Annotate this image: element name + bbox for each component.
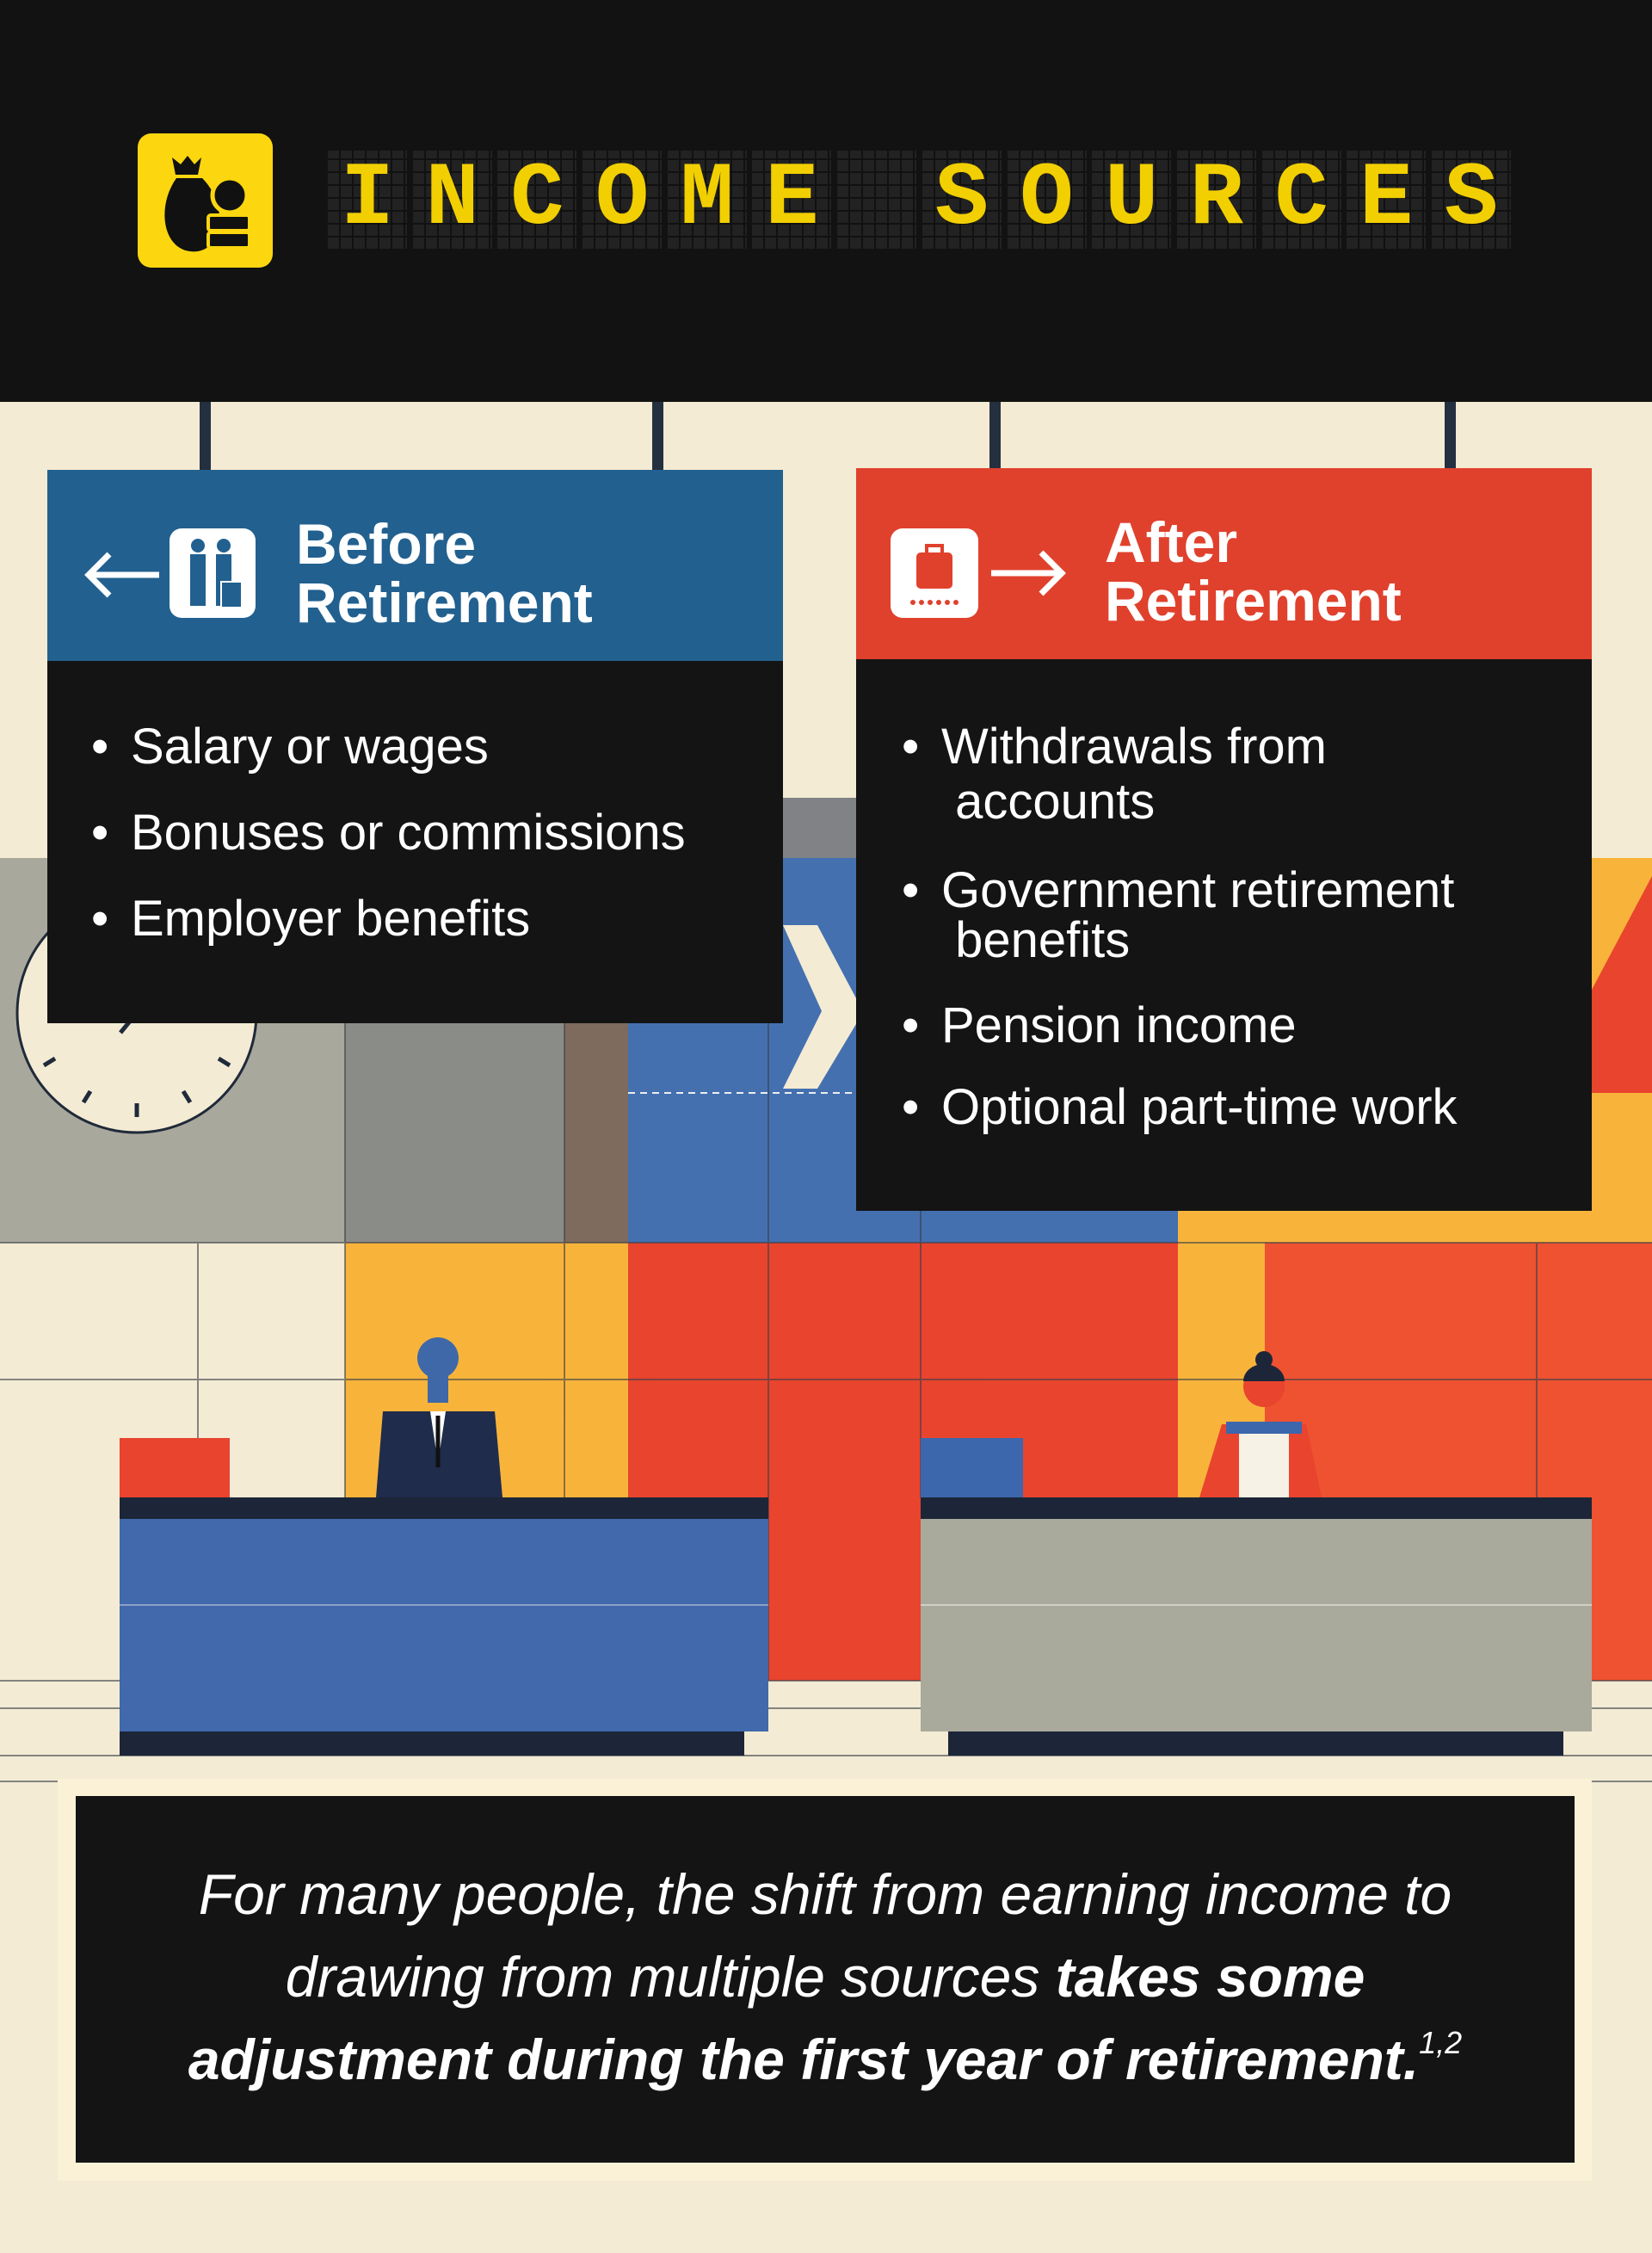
callout: summary — [58, 1779, 1592, 2181]
panel: after retirement — [856, 468, 1592, 1211]
list: after: Optional part-time work — [941, 1079, 1458, 1135]
list: before — [93, 719, 686, 947]
heading: before retirement: Retirement — [296, 571, 593, 634]
list: after: Pension income — [941, 997, 1297, 1053]
icon: plane — [783, 925, 856, 1089]
list: after: accounts — [955, 774, 1155, 830]
icon: clock — [17, 893, 256, 1133]
title: INCOME SOURCES: O — [1020, 149, 1074, 250]
title: INCOME SOURCES — [328, 149, 1511, 250]
title: INCOME SOURCES: N — [425, 149, 479, 250]
desk: right — [921, 1351, 1592, 1756]
heading: after retirement: After — [1105, 510, 1237, 574]
title: INCOME SOURCES: U — [1105, 149, 1158, 250]
list: before: Employer benefits — [131, 891, 530, 947]
heading: after retirement — [856, 468, 1592, 659]
title: INCOME SOURCES: I — [341, 149, 394, 250]
icon: arrow right — [991, 551, 1066, 596]
icon: people with luggage — [170, 528, 256, 618]
title: INCOME SOURCES: S — [1445, 149, 1498, 250]
list: before: Salary or wages — [131, 719, 489, 775]
desk: left — [120, 1337, 768, 1756]
title: INCOME SOURCES: C — [1274, 149, 1328, 250]
icon: money bag — [138, 133, 273, 268]
title: INCOME SOURCES: O — [595, 149, 649, 250]
title: INCOME SOURCES: E — [765, 149, 819, 250]
title: INCOME SOURCES: S — [935, 149, 989, 250]
panel: before retirement — [47, 470, 783, 1023]
icon: arrow left — [84, 552, 159, 597]
list: after: Withdrawals from — [941, 719, 1327, 775]
heading: before retirement — [47, 470, 783, 661]
title: INCOME SOURCES: M — [681, 149, 734, 250]
sign posts — [200, 402, 1456, 470]
icon: luggage — [891, 528, 978, 618]
title: INCOME SOURCES: E — [1359, 149, 1413, 250]
title: INCOME SOURCES: R — [1190, 149, 1243, 250]
heading: after retirement: Retirement — [1105, 569, 1402, 633]
callout: summary: For many people, the shift from earning income to — [199, 1862, 1452, 1926]
heading: before retirement: Before — [296, 512, 476, 576]
list: after: Government retirement — [941, 862, 1454, 918]
callout: summary: adjustment during the first year of retirement.1,2 — [188, 2025, 1462, 2091]
callout: summary: drawing from multiple sources takes some — [286, 1945, 1365, 2009]
list: after: benefits — [955, 912, 1130, 968]
list: after — [903, 719, 1458, 1135]
list: before: Bonuses or commissions — [131, 805, 686, 861]
title: INCOME SOURCES: C — [510, 149, 564, 250]
header band — [0, 0, 1652, 402]
